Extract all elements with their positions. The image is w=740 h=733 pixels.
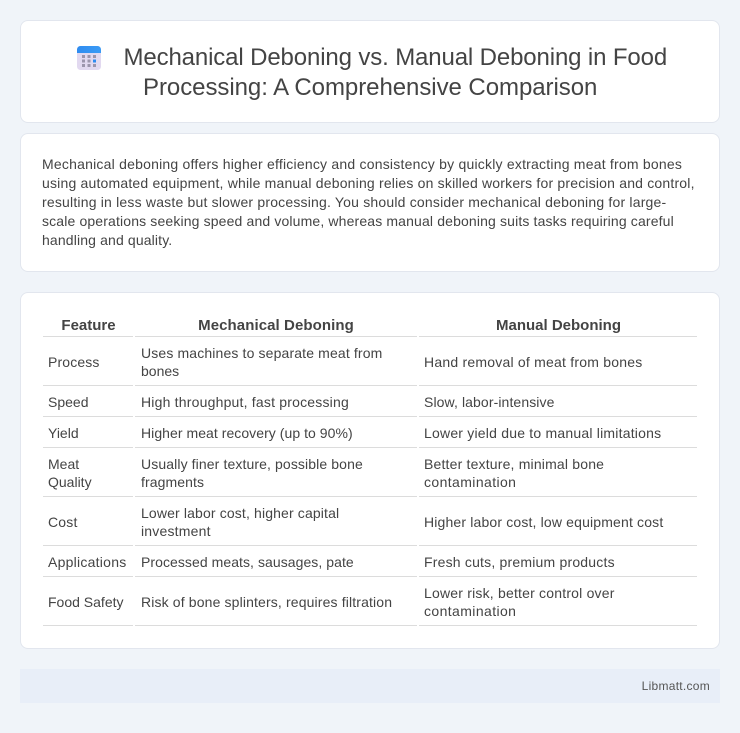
table header: Mechanical Deboning: [198, 317, 354, 334]
row: cost: Higher labor cost, low equipment cost: [424, 514, 663, 530]
row: process: Uses machines to separate meat from: [141, 345, 382, 361]
row: meat quality: Usually finer texture, possible bone: [141, 456, 363, 472]
row: process: Hand removal of meat from bones: [424, 354, 642, 370]
row: cost: Lower labor cost, higher capital: [141, 505, 339, 521]
row: applications: [48, 554, 615, 570]
intro paragraph: handling and quality.: [42, 232, 172, 248]
row: applications: Applications: [48, 554, 126, 570]
title: Processing: A Comprehensive Comparison: [143, 74, 597, 101]
title: Mechanical Deboning vs. Manual Deboning in Food: [124, 44, 667, 71]
row: food safety: [48, 585, 615, 619]
row: food safety: contamination: [424, 603, 516, 619]
row: meat quality: Quality: [48, 474, 92, 490]
row: speed: Slow, labor-intensive: [424, 394, 554, 410]
row: speed: High throughput, fast processing: [141, 394, 349, 410]
intro paragraph: using automated equipment, while manual deboning relies on skilled workers for precision and control,: [42, 175, 695, 191]
row: yield: Higher meat recovery (up to 90%): [141, 425, 353, 441]
footer bar: [20, 669, 720, 703]
row: process: Process: [48, 354, 100, 370]
row lines: [43, 336, 697, 626]
table header: [61, 317, 621, 334]
intro paragraph: scale operations seeking speed and volume, whereas manual deboning suits tasks requiring careful: [42, 213, 674, 229]
row: cost: [48, 505, 664, 539]
table header: Manual Deboning: [496, 317, 621, 334]
row: process: [48, 345, 642, 379]
row: yield: Lower yield due to manual limitations: [424, 425, 661, 441]
row: meat quality: fragments: [141, 474, 204, 490]
intro paragraph: Mechanical deboning offers higher efficiency and consistency by quickly extracting meat from bones: [42, 156, 682, 172]
intro panel: [20, 133, 720, 272]
row: applications: Processed meats, sausages, pate: [141, 554, 354, 570]
row: meat quality: Meat: [48, 456, 79, 472]
row: cost: Cost: [48, 514, 78, 530]
row: yield: [48, 425, 661, 441]
title card: [20, 20, 720, 123]
row: meat quality: [48, 456, 604, 490]
comparison table panel: [20, 292, 720, 649]
row: meat quality: contamination: [424, 474, 516, 490]
row: food safety: Lower risk, better control over: [424, 585, 615, 601]
row: speed: Speed: [48, 394, 88, 410]
row: meat quality: Better texture, minimal bone: [424, 456, 604, 472]
row: cost: investment: [141, 523, 211, 539]
intro paragraph: resulting in less waste but slower processing. You should consider mechanical deboning for large-: [42, 194, 666, 210]
title: [124, 44, 667, 101]
row: process: bones: [141, 363, 179, 379]
intro paragraph: [42, 156, 695, 248]
footer credit: Libmatt.com: [642, 679, 710, 693]
row: applications: Fresh cuts, premium products: [424, 554, 615, 570]
row: food safety: Food Safety: [48, 594, 124, 610]
icon: calendar: [77, 46, 101, 70]
row: speed: [48, 394, 554, 410]
row: food safety: Risk of bone splinters, requires filtration: [141, 594, 392, 610]
row: yield: Yield: [48, 425, 79, 441]
table header: Feature: [61, 317, 116, 334]
